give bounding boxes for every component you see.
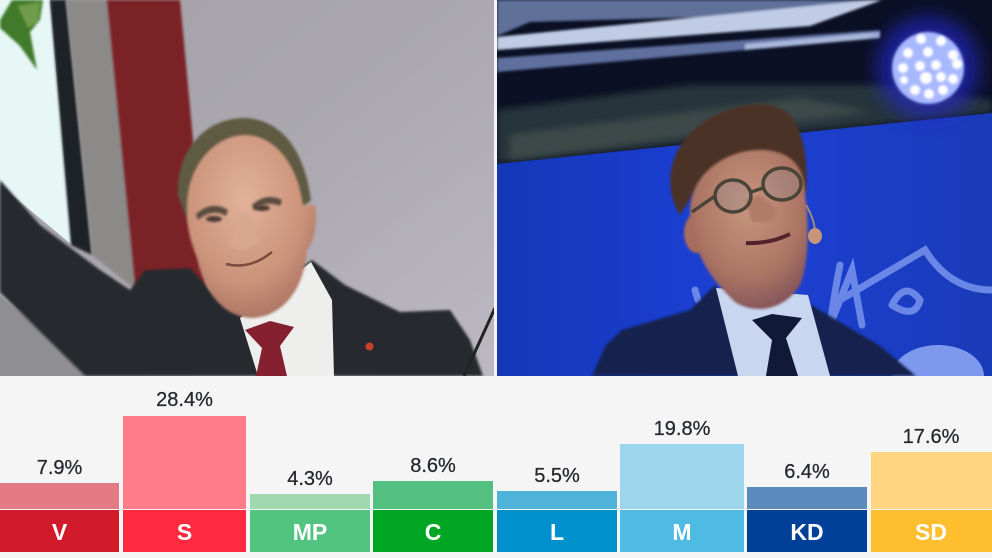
microphone stand xyxy=(464,308,495,376)
shirt collar xyxy=(716,288,830,376)
column: KD: 6.4% xyxy=(784,461,830,483)
balcony xyxy=(497,85,992,163)
photo: left party leader waving xyxy=(0,0,495,376)
column: L xyxy=(497,376,617,552)
pin xyxy=(366,342,374,350)
face xyxy=(178,118,316,318)
backdrop handwriting xyxy=(695,250,992,325)
head xyxy=(670,104,822,309)
ceiling beams xyxy=(497,0,882,72)
suit xyxy=(0,180,483,376)
tie xyxy=(245,321,294,376)
column: KD xyxy=(747,376,867,552)
column: M: M xyxy=(672,519,692,545)
column: SD xyxy=(871,376,992,552)
column: L: L xyxy=(550,519,564,545)
column: C xyxy=(373,376,493,552)
headset mic xyxy=(806,205,815,234)
glasses xyxy=(692,168,801,212)
column: C: C xyxy=(425,519,441,545)
column: S: 28.4% xyxy=(156,389,213,411)
photo: right party leader on blue stage xyxy=(497,0,992,407)
column: C: 8.6% xyxy=(410,455,456,477)
column: V: V xyxy=(52,519,68,545)
column: S: S xyxy=(177,519,192,545)
column: SD: 17.6% xyxy=(903,426,960,448)
column: SD: SD xyxy=(915,519,947,545)
column: M xyxy=(620,376,744,552)
column: S xyxy=(123,376,246,552)
bar chart: election results by party xyxy=(0,376,992,552)
column: M: 19.8% xyxy=(654,418,711,440)
stage light xyxy=(876,16,980,120)
column: L: 5.5% xyxy=(534,465,580,487)
tie xyxy=(752,314,802,376)
column: KD: KD xyxy=(790,519,824,545)
column: MP: MP xyxy=(293,519,327,545)
column: V xyxy=(0,376,119,552)
shirt xyxy=(240,262,334,376)
column: MP: 4.3% xyxy=(287,468,333,490)
navy suit xyxy=(592,285,916,376)
column: V: 7.9% xyxy=(37,457,83,479)
leaves xyxy=(0,0,43,70)
column: MP xyxy=(250,376,370,552)
blue backdrop xyxy=(497,113,992,376)
